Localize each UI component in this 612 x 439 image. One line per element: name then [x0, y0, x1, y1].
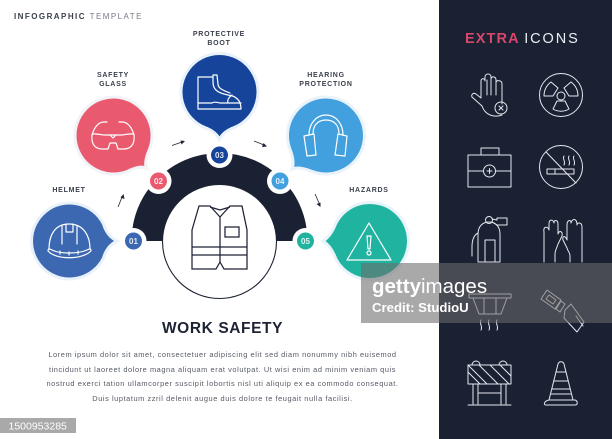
- body text: Lorem ipsum dolor sit amet, consectetuer adipiscing elit sed diam nonummy nibh euisemod: [48, 350, 397, 359]
- badge: 04: 04: [276, 177, 285, 186]
- icon: headphones: [304, 115, 347, 156]
- badge: 02: [146, 168, 172, 194]
- body text: [46, 350, 399, 403]
- label: protective boot: PROTECTIVE: [193, 31, 245, 38]
- icon: warning triangle: [347, 223, 391, 260]
- bubble: hazards: [323, 187, 408, 280]
- arrows between steps: [118, 140, 320, 207]
- bubble: safety glass: [75, 72, 152, 174]
- bubble: helmet: [32, 187, 117, 279]
- icon: radiation: [540, 74, 582, 116]
- icon: hot surface: [469, 294, 511, 330]
- icon: safety glasses: [92, 122, 134, 149]
- icon: seat belt: [541, 290, 584, 332]
- icon: gloves: [544, 219, 582, 262]
- title: WORK SAFETY: [162, 320, 283, 337]
- header label: INFOGRAPHIC TEMPLATE: [14, 12, 143, 21]
- icon: fire extinguisher: [472, 216, 507, 262]
- icon: medical case: [468, 148, 511, 187]
- body text: nostrud exerci tation ullamcorper suscipit lobortis nisl uti aliquip ex ea commodo consequat.: [46, 379, 399, 388]
- watermark text: gettyimages: [372, 275, 487, 298]
- badge: 01: 01: [129, 237, 138, 246]
- label: hazards: HAZARDS: [349, 187, 389, 194]
- label: helmet: HELMET: [52, 187, 86, 194]
- icon: hand stop: [472, 74, 507, 116]
- badge: 02: 02: [154, 177, 163, 186]
- icon: boot: [198, 75, 241, 109]
- center circle with vest: [162, 184, 276, 298]
- icon: traffic cone: [544, 362, 577, 405]
- bubble: protective boot: [181, 31, 258, 139]
- icon: safety vest: [192, 206, 247, 269]
- icon: road barrier: [468, 361, 511, 405]
- icon: no smoking: [540, 146, 582, 188]
- bubble: hearing protection: [287, 72, 364, 174]
- watermark id: 1500953285: [8, 420, 67, 432]
- badge: 05: 05: [301, 237, 310, 246]
- body text: Duis luptatum zzril delenit augue duis dolore te feugait nulla facilisi.: [92, 394, 353, 403]
- badge: 03: [206, 142, 232, 168]
- icon: helmet: [48, 224, 91, 258]
- badge: 03: 03: [215, 151, 224, 160]
- label: safety glass: SAFETY: [97, 72, 129, 79]
- bubble: hearing protection: PROTECTION: [299, 81, 353, 88]
- label: hearing protection: HEARING: [307, 72, 345, 79]
- bubble: protective boot: BOOT: [207, 40, 231, 47]
- badge: 04: [267, 168, 293, 194]
- body text: tincidunt ut laoreet dolore magna aliquam erat volutpat. Ut wisi enim ad minim veniam quis: [49, 365, 396, 374]
- watermark id: [0, 418, 76, 433]
- badge: 05: [292, 228, 318, 254]
- watermark band: Credit: StudioU: [372, 300, 469, 315]
- heading: extra icons: EXTRA ICONS: [465, 31, 580, 47]
- bubble: safety glass: GLASS: [99, 81, 127, 88]
- panel: extra icons background: [439, 0, 612, 439]
- watermark band: [361, 263, 612, 323]
- half ring: [132, 153, 308, 241]
- badge: 01: [120, 228, 146, 254]
